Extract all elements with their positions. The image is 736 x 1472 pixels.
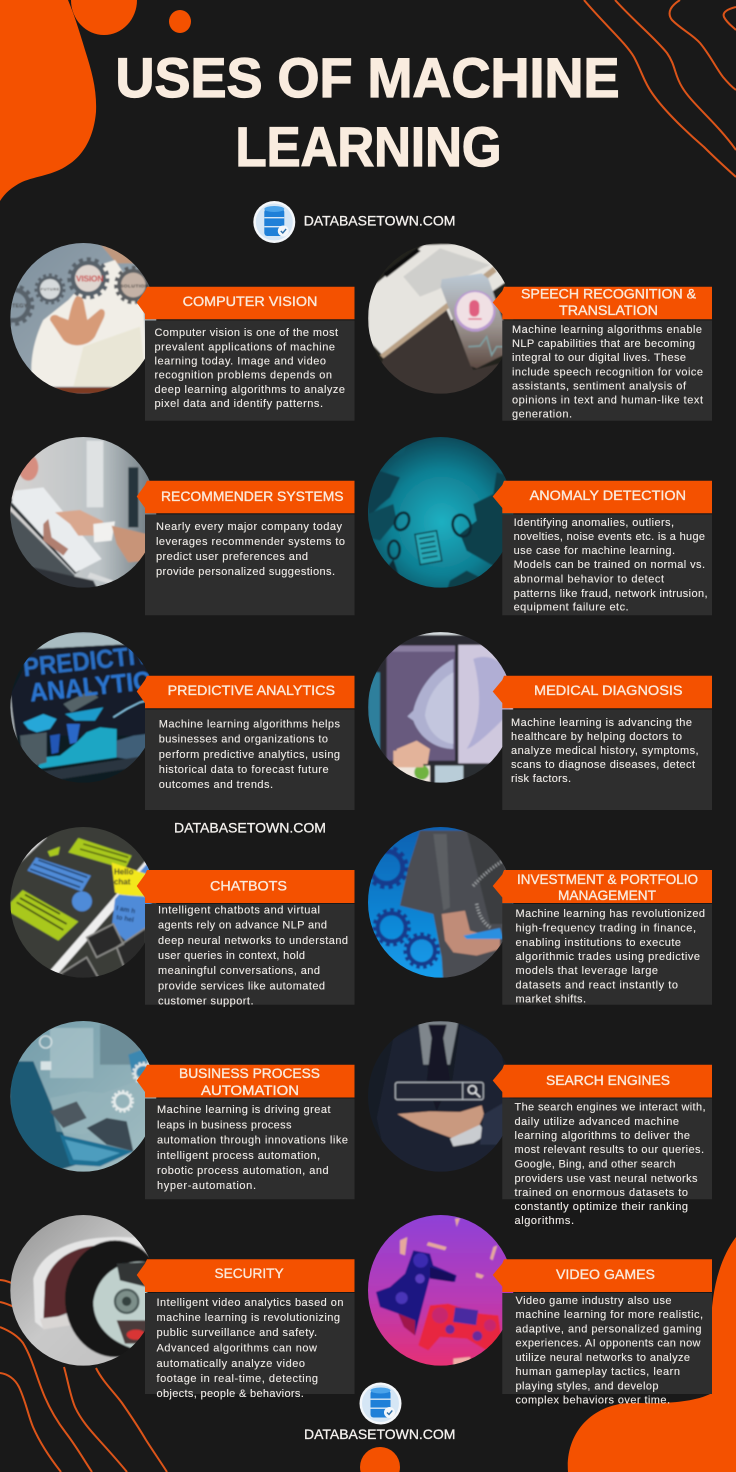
photo: predictive analytics screen (10, 632, 156, 782)
description text: most relevant results to our queries. (514, 1144, 704, 1156)
description text (156, 521, 345, 578)
header banner (493, 676, 712, 708)
description text: machine learning is revolutionizing (156, 1312, 340, 1324)
photo: chat bubbles on a keyboard: chat (114, 878, 131, 887)
description text (514, 1102, 706, 1227)
header banner (137, 1065, 354, 1098)
description text: meaningful conversations, and (158, 965, 320, 977)
header banner (493, 287, 712, 319)
heading: INVESTMENT & PORTFOLIO (517, 871, 698, 887)
description panel (145, 514, 354, 615)
description text: learning algorithms to deliver the (514, 1130, 690, 1142)
description text: market shifts. (516, 994, 586, 1006)
title (116, 46, 620, 178)
description text: Advanced algorithms can now (156, 1342, 317, 1354)
heading: TRANSLATION (559, 302, 658, 318)
heading: MANAGEMENT (558, 887, 656, 903)
description text: Machine learning algorithms enable (512, 324, 702, 336)
header banner (137, 481, 354, 513)
description text: Intelligent chatbots and virtual (158, 904, 320, 916)
description text: Video game industry also use (516, 1295, 672, 1307)
description panel (502, 320, 712, 421)
description text: Google, Bing, and other search (514, 1158, 676, 1170)
heading: SECURITY (214, 1265, 284, 1281)
panel: anomaly detection (363, 434, 712, 615)
panel: security (0, 1212, 354, 1400)
description text: high-frequency trading in finance, (516, 922, 696, 934)
description text: complex behaviors over time. (516, 1394, 670, 1406)
panel: investment and portfolio management (363, 824, 712, 1006)
panel: chatbots (0, 824, 354, 1008)
description text: Machine learning is driving great (157, 1104, 330, 1116)
description text: abnormal behavior to detect (514, 574, 664, 586)
description panel (145, 1293, 354, 1394)
photo: finger touching gears: FUTURE (41, 286, 60, 291)
heading: VIDEO GAMES (556, 1266, 655, 1282)
description text: algorithmic trades using predictive (516, 951, 700, 963)
description text: Identifying anomalies, outliers, (514, 517, 674, 529)
decoration: top-right contour lines (584, 0, 736, 177)
description text: daily utilize advanced machine (514, 1116, 679, 1128)
description text: opinions in text and human-like text (512, 394, 703, 406)
description text: The search engines we interact with, (514, 1102, 706, 1114)
heading: PREDICTIVE ANALYTICS (168, 682, 335, 698)
panel: search engines (363, 1018, 712, 1227)
header banner (137, 1259, 354, 1292)
decoration: bottom circle (360, 1447, 400, 1472)
header banner (493, 870, 712, 903)
panel: recommender systems (0, 434, 354, 615)
description text: provide services like automated (158, 980, 325, 992)
site logo and name (bottom) (304, 1382, 455, 1442)
description text: prevalent applications of machine (154, 341, 335, 353)
photo: predictive analytics screen: ANALYTIC (28, 665, 152, 708)
description text: provide personalized suggestions. (156, 566, 335, 578)
heading: COMPUTER VISION (183, 293, 317, 309)
description text: pixel data and identify patterns. (154, 398, 323, 410)
photo: chat bubbles on a keyboard: I am h (116, 905, 136, 915)
decoration: bottom-left contour lines (0, 1280, 167, 1472)
description text: Machine learning has revolutionized (516, 908, 705, 920)
photo: chat bubbles on a keyboard: Hello (114, 868, 134, 877)
description text: assistants, sentiment analysis of (512, 380, 687, 392)
description text: public surveillance and safety. (156, 1327, 317, 1339)
description text (516, 908, 705, 1006)
description text (158, 904, 348, 1008)
description text (154, 327, 345, 410)
photo: finger touching gears: TEGY (12, 304, 28, 310)
decoration: top circle (71, 0, 137, 35)
photo: finger touching gears: VISION (76, 274, 103, 284)
description text: playing styles, and develop (516, 1380, 658, 1392)
description text: experiences. AI opponents can now (516, 1338, 701, 1350)
description text: utilize neural networks to analyze (516, 1352, 690, 1364)
photo: detectives with magnifying glasses (368, 437, 514, 588)
description text: businesses and organizations to (159, 734, 328, 746)
description text (516, 1295, 703, 1406)
decoration: small dot (169, 10, 191, 33)
panel: computer vision (0, 240, 355, 421)
photo: finger touching gears: SOLUTION (120, 284, 149, 290)
heading: CHATBOTS (210, 878, 287, 894)
description text: leverages recommender systems to (156, 536, 345, 548)
description text: adaptive, and personalized gaming (516, 1324, 702, 1336)
description text: automation through innovations like (157, 1134, 348, 1146)
heading (517, 871, 698, 903)
photo: chat bubbles on a keyboard: to hel (116, 914, 134, 924)
heading: MEDICAL DIAGNOSIS (534, 682, 683, 698)
description text: equipment failure etc. (514, 602, 629, 614)
description text: customer support. (158, 996, 254, 1008)
description text: Machine learning algorithms helps (159, 718, 340, 730)
description panel (145, 710, 354, 810)
description panel (502, 710, 712, 810)
description text: providers use vast neural networks (514, 1173, 698, 1185)
title: LEARNING (236, 115, 502, 178)
description text: robotic process automation, and (157, 1165, 329, 1177)
description text: outcomes and trends. (159, 779, 273, 791)
header banner (137, 287, 354, 319)
photo: medical scans on screen (368, 632, 514, 783)
description text: include speech recognition for voice (512, 366, 703, 378)
panel: speech recognition (363, 240, 712, 421)
site name: DATABASETOWN.COM (304, 213, 455, 229)
description text: Nearly every major company today (156, 521, 342, 533)
description text: human gameplay tactics, learn (516, 1366, 680, 1378)
description text: datasets and react instantly to (516, 980, 678, 992)
heading: BUSINESS PROCESS (179, 1065, 320, 1081)
description panel (502, 514, 712, 615)
photo: game controllers (368, 1215, 514, 1366)
description text: Computer vision is one of the most (154, 327, 338, 339)
header banner (493, 1065, 712, 1098)
description text: footage in real-time, detecting (156, 1373, 318, 1385)
description text: machine learning for more realistic, (516, 1309, 703, 1321)
description text: Intelligent video analytics based on (156, 1297, 344, 1309)
decoration: top-left orange blob (0, 0, 96, 201)
description text (159, 718, 340, 791)
photo: businessman with phone and gears (368, 827, 514, 978)
photo: chat bubbles on a keyboard (10, 827, 156, 978)
decoration: bottom-right orange blob (568, 1237, 736, 1472)
description text: agents rely on advance NLP and (158, 920, 327, 932)
heading: SEARCH ENGINES (546, 1072, 670, 1088)
description text: objects, people & behaviors. (156, 1388, 304, 1400)
description panel (145, 904, 354, 1005)
photo: hands on a laptop with gears (10, 1021, 156, 1172)
description panel (145, 320, 354, 421)
description text: healthcare by helping doctors to (511, 731, 682, 743)
photo: phone with microphone (368, 243, 513, 394)
panel: video games (363, 1212, 712, 1406)
description text: recognition problems depends on (154, 370, 332, 382)
photo: security camera (10, 1215, 149, 1366)
description text: algorithms. (514, 1215, 574, 1227)
description text: analyze medical history, symptoms, (511, 745, 699, 757)
header banner (137, 870, 354, 903)
heading: AUTOMATION (201, 1082, 299, 1098)
description text: risk factors. (511, 773, 571, 785)
description text: scans to diagnose diseases, detect (511, 759, 695, 771)
description text: constantly optimize their ranking (514, 1201, 688, 1213)
heading: RECOMMENDER SYSTEMS (161, 488, 344, 504)
icon: database logo (253, 201, 295, 243)
panel: business process automation (0, 1018, 354, 1199)
heading: ANOMALY DETECTION (530, 487, 686, 503)
header banner (493, 481, 712, 513)
description panel (502, 1098, 712, 1199)
description text: patterns like fraud, network intrusion, (514, 588, 708, 600)
description text: historical data to forecast future (159, 764, 329, 776)
description text: deep neural networks to understand (158, 935, 348, 947)
photo: finger touching gears (10, 243, 156, 394)
description panel (502, 904, 712, 1005)
description text: user queries in context, hold (158, 950, 305, 962)
description text: hyper-automation. (157, 1180, 256, 1192)
description text: novelties, noise events etc. is a huge (514, 531, 705, 543)
photo: businessman with search bar (368, 1021, 513, 1172)
description text (511, 717, 699, 785)
description text: learning today. Image and video (154, 356, 326, 368)
site name: DATABASETOWN.COM (304, 1426, 455, 1442)
photo: hands on a tablet (10, 437, 156, 588)
description text: predict user preferences and (156, 551, 308, 563)
description text: trained on enormous datasets to (514, 1187, 688, 1199)
heading: SPEECH RECOGNITION & (521, 286, 697, 302)
description panel (145, 1098, 354, 1199)
description text: NLP capabilities that are becoming (512, 338, 695, 350)
icon: database logo (360, 1382, 402, 1424)
description text: perform predictive analytics, using (159, 749, 340, 761)
description text: intelligent process automation, (157, 1150, 320, 1162)
description panel (502, 1293, 712, 1394)
header banner (493, 1259, 712, 1292)
panel: medical diagnosis (363, 629, 712, 810)
photo: predictive analytics screen: PREDICTIV (21, 639, 153, 682)
description text (512, 324, 703, 420)
site logo and name (top) (253, 201, 455, 243)
description text (157, 1104, 348, 1192)
description text: models that leverage large (516, 965, 658, 977)
mid-page site name: DATABASETOWN.COM (174, 820, 326, 836)
heading (179, 1065, 320, 1098)
description text (514, 517, 708, 614)
description text: Machine learning is advancing the (511, 717, 692, 729)
heading (521, 286, 697, 318)
title: USES OF MACHINE (116, 46, 620, 109)
description text: leaps in business process (157, 1120, 292, 1132)
description text: enabling institutions to execute (516, 937, 681, 949)
description text (156, 1297, 344, 1400)
description text: use case for machine learning. (514, 545, 675, 557)
description text: integral to our digital lives. These (512, 352, 686, 364)
description text: generation. (512, 408, 572, 420)
description text: automatically analyze video (156, 1358, 305, 1370)
description text: deep learning algorithms to analyze (154, 384, 345, 396)
header banner (137, 676, 354, 708)
description text: Models can be trained on normal vs. (514, 559, 705, 571)
panel: predictive analytics (0, 629, 354, 810)
